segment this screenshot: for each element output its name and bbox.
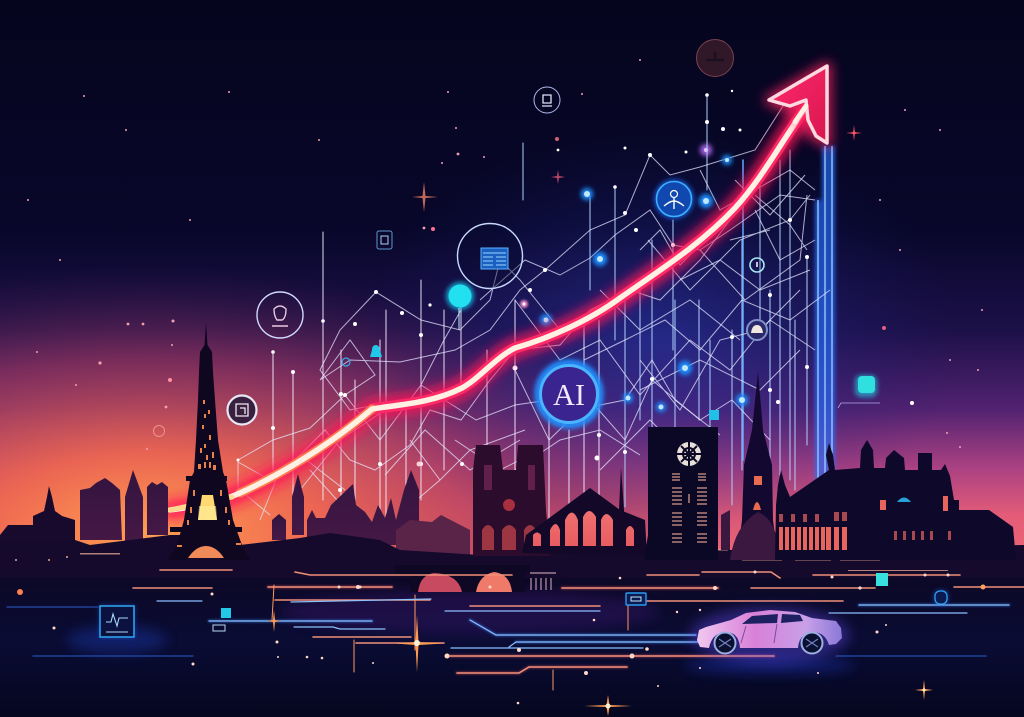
icon: floor chip bbox=[626, 593, 646, 605]
stars bbox=[27, 59, 983, 450]
sparkle: floor stars bbox=[267, 610, 933, 716]
growth arrow: neon curve with arrowhead bbox=[170, 66, 827, 510]
landmark: church spire bbox=[721, 372, 780, 560]
arrowhead bbox=[769, 66, 827, 143]
car: silver-pink sedan bbox=[690, 607, 850, 663]
icon: dome ring bbox=[747, 320, 767, 340]
network: mesh of connecting lines bbox=[238, 95, 830, 520]
icon: faint red circle bbox=[696, 40, 734, 76]
landmark: Notre-Dame cathedral bbox=[473, 445, 550, 556]
network: vertical data lines bbox=[273, 95, 807, 530]
landmark: Eiffel Tower bbox=[168, 322, 250, 560]
car wheels bbox=[714, 632, 822, 654]
skyline: tree line and ground block bbox=[0, 533, 1024, 580]
skyline: far left buildings bbox=[80, 470, 470, 555]
clock rosette bbox=[677, 442, 701, 466]
icon: purple sparkle glow bbox=[520, 137, 712, 308]
circuit lines: orange traces bbox=[133, 570, 1024, 690]
icon: faint ring bbox=[154, 426, 164, 436]
icon: cyan dot bbox=[446, 282, 474, 330]
icon: floor cyan tile right bbox=[876, 573, 888, 586]
windows bbox=[672, 474, 707, 542]
network: bright vertical light beams bbox=[818, 146, 832, 480]
icon: floor ring bbox=[934, 590, 948, 605]
icon: cyan square with callout bbox=[838, 375, 880, 408]
palace arched windows bbox=[779, 496, 951, 550]
sparkle: sky stars bbox=[412, 125, 862, 231]
network: glowing nodes bbox=[236, 93, 809, 492]
icon: AI badge bbox=[538, 363, 600, 425]
icon: cyan square floor bbox=[213, 608, 231, 631]
ground: building window lights bbox=[15, 549, 948, 571]
icon: cyan bell bbox=[342, 345, 382, 366]
landmark: tower block with clock bbox=[644, 427, 718, 560]
AI label: AI bbox=[553, 377, 585, 412]
car body bbox=[697, 610, 842, 648]
icon: lamp circle bbox=[257, 292, 303, 338]
icon: cyan tile bbox=[709, 410, 719, 420]
circuit lines: blue traces bbox=[7, 599, 1009, 656]
icon: small person circle bbox=[534, 87, 560, 113]
icon: chat circle bbox=[228, 396, 256, 424]
icon: chart chip bbox=[99, 605, 135, 638]
icon: book circle bbox=[458, 224, 522, 288]
skyline: left church bbox=[0, 486, 75, 560]
landmark: palace bbox=[775, 440, 1016, 560]
lattice lights bbox=[177, 400, 241, 547]
icon: keyhole ring bbox=[750, 258, 764, 272]
icon: person in blue circle bbox=[654, 179, 694, 219]
landmark: Seine bridge bbox=[395, 565, 556, 592]
landmark: arcade with arches bbox=[522, 467, 647, 556]
icon: small rounded box bbox=[377, 231, 392, 249]
car windows bbox=[742, 614, 803, 624]
floor lights bbox=[17, 570, 986, 704]
ground: dark circuit floor bbox=[0, 578, 1024, 717]
